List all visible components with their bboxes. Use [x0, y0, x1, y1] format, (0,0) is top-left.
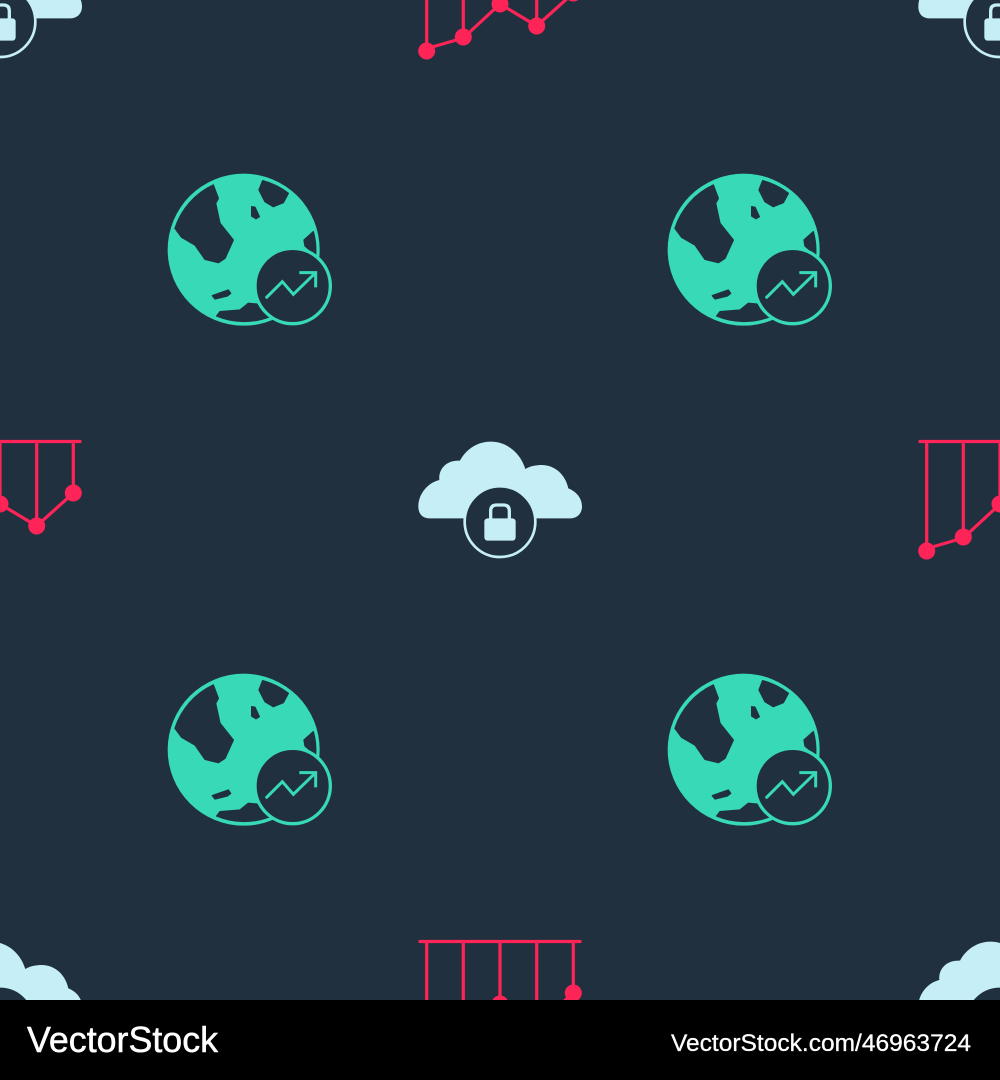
icon: cloud lock bottom right [918, 942, 1000, 1057]
icon: globe growth top left [168, 174, 330, 326]
icon: globe growth bottom right [668, 674, 830, 826]
icon: cloud lock top left [0, 0, 82, 57]
icon: cloud lock bottom left [0, 942, 82, 1057]
icon: network chart left [0, 442, 82, 560]
icon: network chart bottom [418, 942, 582, 1060]
icon: cloud lock top right [918, 0, 1000, 57]
icon: globe growth top right [668, 174, 830, 326]
image reference: VectorStock.com/46963724 [671, 1030, 971, 1057]
icon: network chart right [918, 442, 1000, 560]
icon: cloud lock centre [418, 442, 582, 557]
icon: globe growth bottom left [168, 674, 330, 826]
watermark bar [0, 1000, 1000, 1080]
icon: network chart top [418, 0, 582, 60]
brand name: VectorStock [27, 1019, 219, 1060]
